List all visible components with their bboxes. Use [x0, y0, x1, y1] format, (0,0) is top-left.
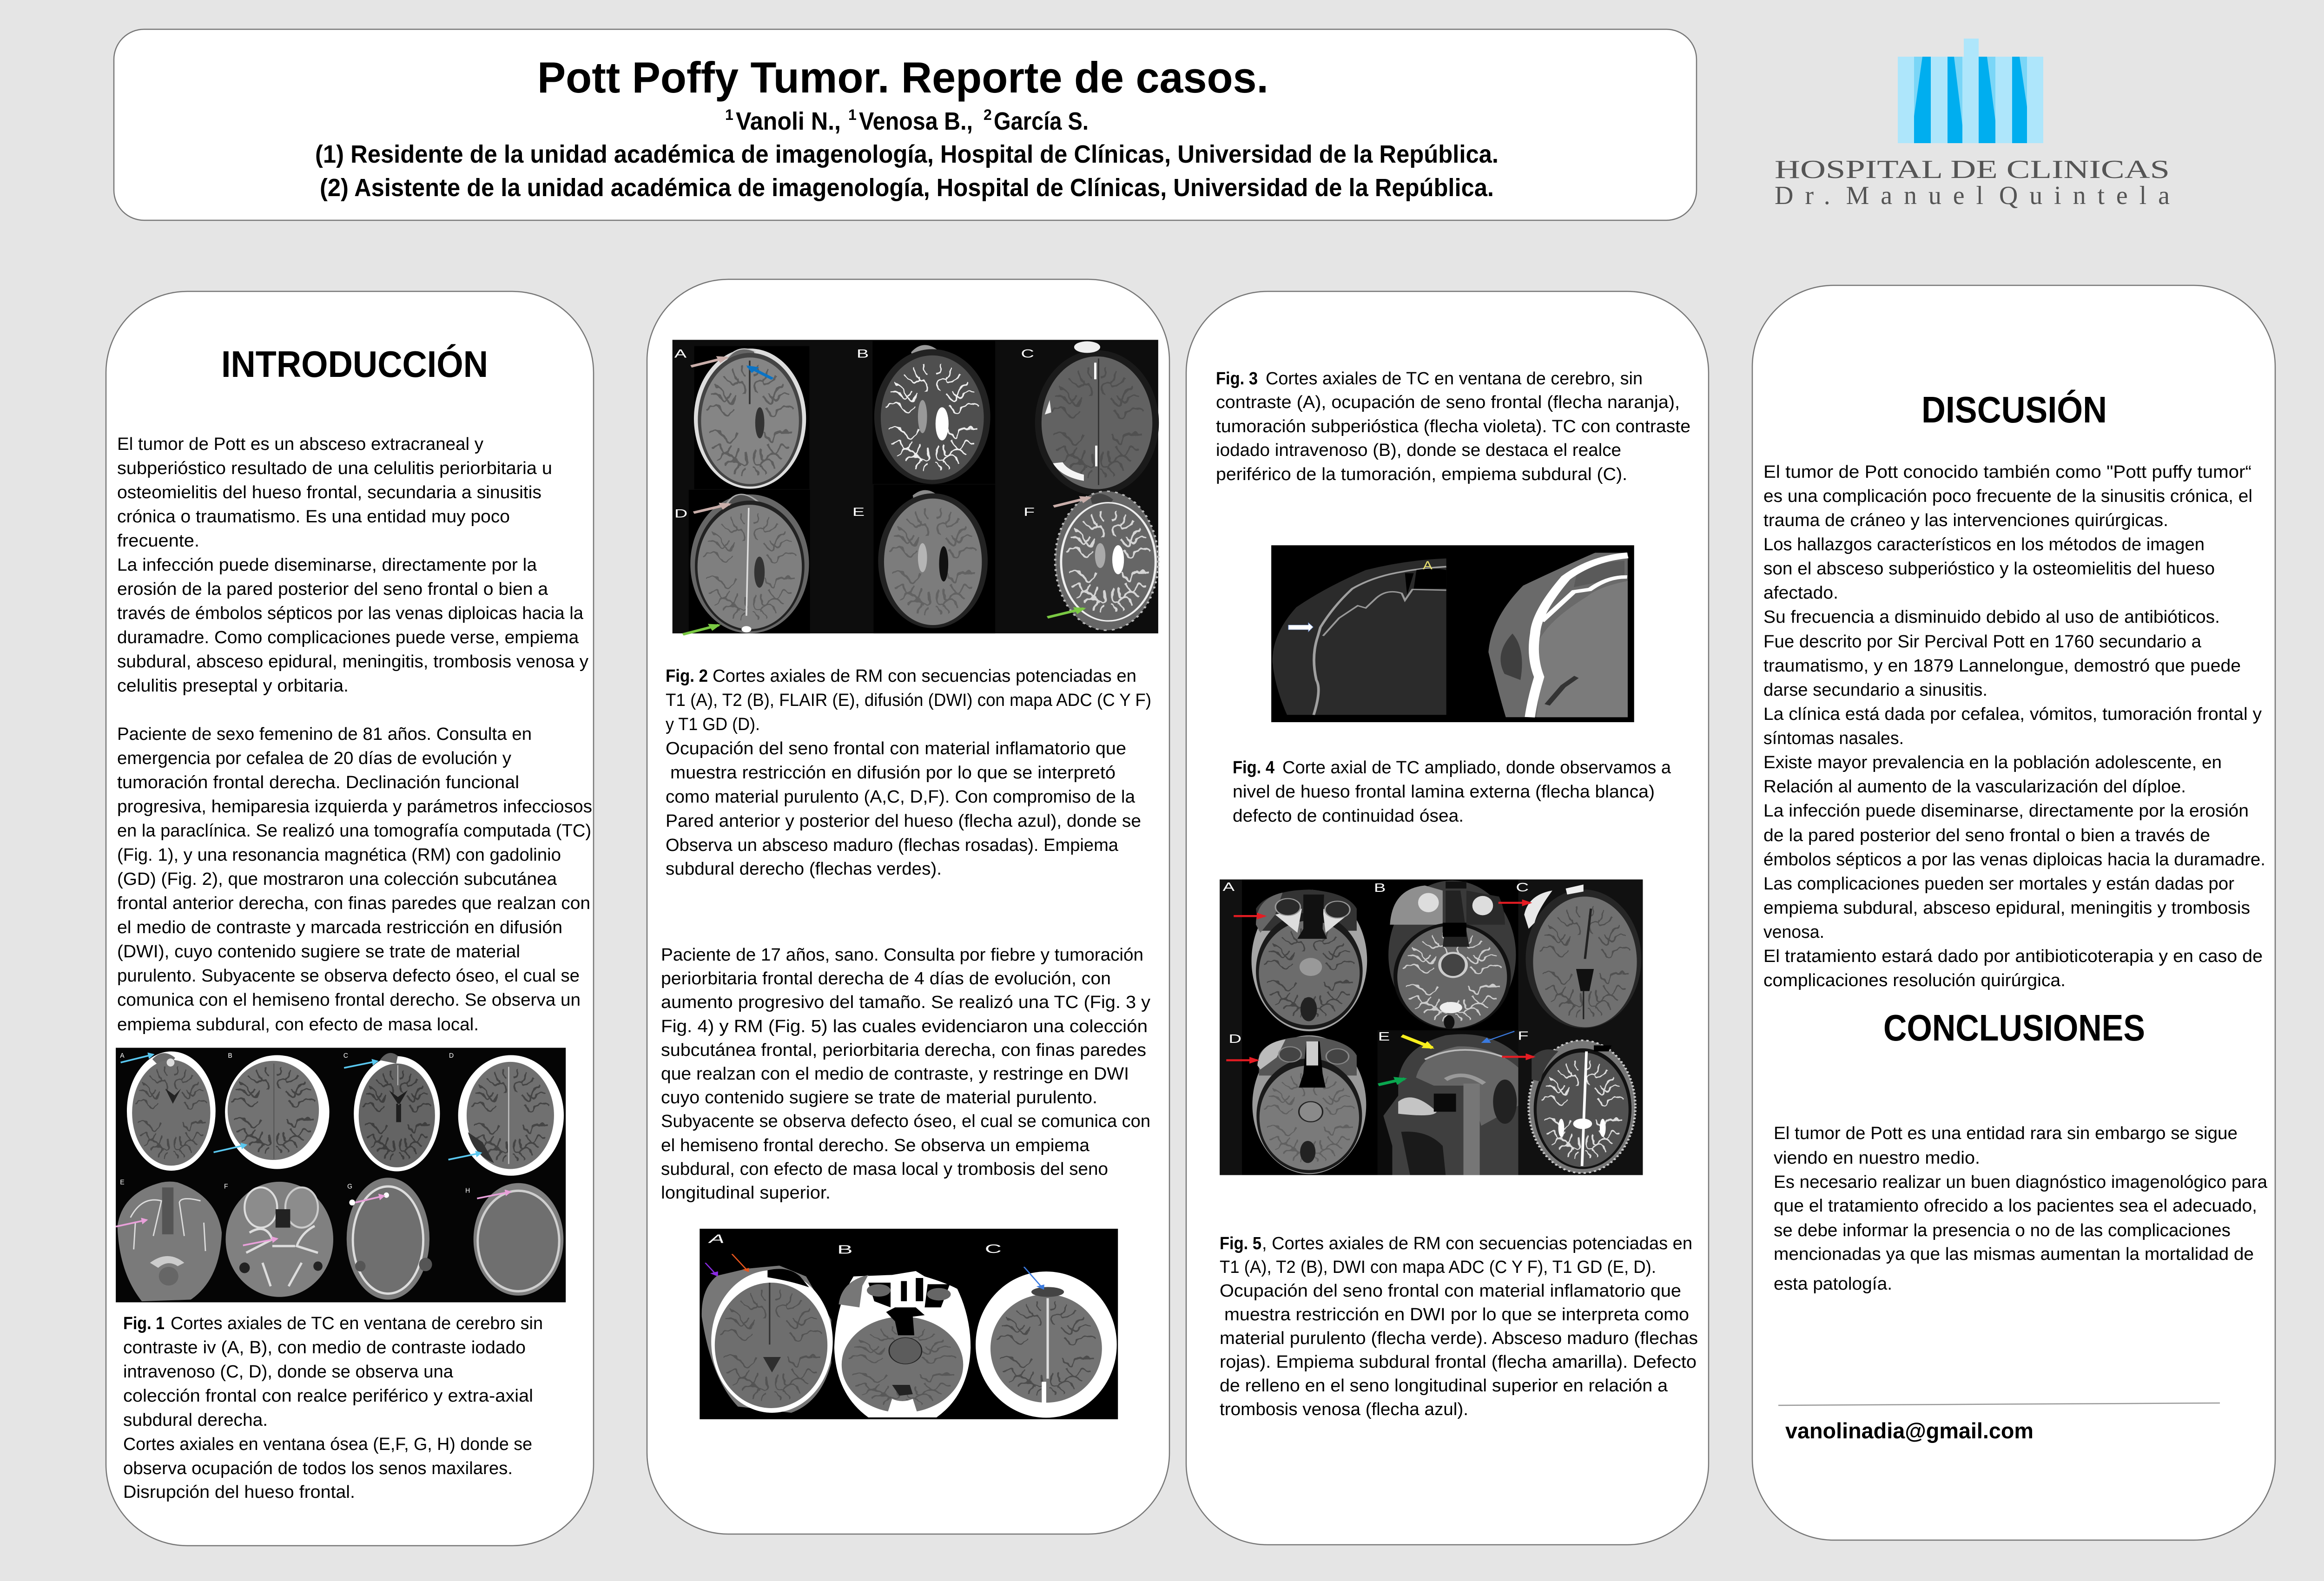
- text block: discussion: La infección puede diseminarse, directamente por la erosión: [1763, 801, 2249, 821]
- logo: Hospital de Clínicas: [1775, 39, 2170, 210]
- caption: figure 2: Cortes axiales de RM con secuencias potenciadas en: [713, 666, 1136, 686]
- caption: figure 2: [666, 666, 1151, 879]
- text block: introduction: La infección puede diseminarse, directamente por la: [117, 555, 537, 575]
- scan A: [702, 1265, 833, 1413]
- title: Pott Poffy Tumor. Reporte de casos.: [537, 53, 1268, 102]
- text block: case 1: (GD) (Fig. 2), que mostraron una colección subcutánea: [117, 870, 557, 889]
- panel letters: B: [857, 347, 869, 360]
- panel letters: [120, 1052, 470, 1195]
- text block: case 2: que realzan con el medio de contraste, y restringe en DWI: [661, 1064, 1129, 1084]
- caption: figure 1: [123, 1314, 543, 1502]
- caption: figure 2: muestra restricción en difusión por lo que se interpretó: [670, 763, 1116, 783]
- caption: figure 1: colección frontal con realce periférico y extra-axial: [123, 1386, 533, 1406]
- text block: introduction: duramadre. Como complicaciones puede verse, empiema: [117, 628, 579, 647]
- caption: figure 2: Pared anterior y posterior del hueso (flecha azul), donde se: [666, 811, 1141, 831]
- text block: case 2: [661, 945, 1150, 1203]
- caption: figure 5: de relleno en el seno longitudinal superior en relación a: [1220, 1376, 1668, 1396]
- arrows: red, yellow, blue, green: [1226, 903, 1534, 1085]
- caption: figure 5: [1220, 1234, 1698, 1419]
- caption: figure 3: contraste (A), ocupación de seno frontal (flecha naranja),: [1216, 393, 1680, 412]
- panel letters: [1223, 880, 1529, 1046]
- text block: case 1: [117, 725, 592, 1034]
- caption: figure 1: Cortes axiales de TC en ventana de cerebro sin: [171, 1314, 543, 1333]
- text block: case 1: (Fig. 1), y una resonancia magnética (RM) con gadolinio: [117, 845, 561, 865]
- text block: case 1: frontal anterior derecha, con finas paredes que realzan con: [117, 894, 590, 913]
- scan G: [347, 1178, 432, 1300]
- text block: discussion: de la pared posterior del seno frontal o bien a través de: [1763, 826, 2210, 845]
- text block: conclusions: Es necesario realizar un buen diagnóstico imagenológico para: [1774, 1173, 2268, 1192]
- scan E: [118, 1182, 222, 1301]
- scan B: [874, 345, 990, 484]
- text block: discussion: El tumor de Pott conocido también como "Pott puffy tumor“: [1763, 462, 2251, 482]
- authors: 1: [848, 106, 857, 123]
- text block: case 1: comunica con el hemiseno frontal derecho. Se observa un: [117, 990, 581, 1010]
- text block: discussion: complicaciones resolución quirúrgica.: [1763, 971, 2066, 990]
- caption: figure 2: Ocupación del seno frontal con material inflamatorio que: [666, 739, 1126, 758]
- scan C: [976, 1271, 1117, 1418]
- caption: figure 4: nivel de hueso frontal lamina externa (flecha blanca): [1233, 782, 1655, 802]
- figure 4: zoomed CT: [1271, 545, 1634, 722]
- text block: introduction: erosión de la pared posterior del seno frontal o bien a: [117, 580, 548, 599]
- text block: introduction: través de émbolos sépticos por las venas diploicas hacia la: [117, 604, 584, 623]
- text block: case 1: el medio de contraste y marcada restricción en difusión: [117, 918, 562, 937]
- text block: case 1: en la paraclínica. Se realizó una tomografía computada (TC): [117, 821, 591, 841]
- scan F: [1055, 491, 1158, 630]
- authors: Vanoli N.,: [736, 107, 841, 135]
- scan B: [834, 1271, 971, 1417]
- logo name: HOSPITAL DE CLINICAS: [1775, 155, 2170, 184]
- scan B: [225, 1055, 330, 1169]
- text block: case 1: Paciente de sexo femenino de 81 años. Consulta en: [117, 725, 532, 744]
- caption: figure 1: Cortes axiales en ventana ósea (E,F, G, H) donde se: [123, 1435, 532, 1454]
- panel letters: C: [1516, 880, 1529, 894]
- text block: case 2: Subyacente se observa defecto óseo, el cual se comunica con: [661, 1112, 1150, 1131]
- scan A: [127, 1052, 216, 1171]
- affiliation 2: (2) Asistente de la unidad académica de imagenología, Hospital de Clínicas, Universidad de la República.: [320, 174, 1494, 202]
- panel letters: A: [674, 347, 687, 360]
- panel: figure 2 and case 2: [647, 279, 1169, 1534]
- figure 2: MRI scans: [673, 340, 1159, 634]
- text block: discussion: trauma de cráneo y las intervenciones quirúrgicas.: [1763, 511, 2168, 530]
- caption: figure 4: Corte axial de TC ampliado, donde observamos a: [1282, 758, 1671, 777]
- caption: figure 2: Fig. 2: [666, 666, 708, 686]
- text block: conclusions: que el tratamiento ofrecido a los pacientes sea el adecuado,: [1774, 1196, 2257, 1216]
- scan C: [354, 1053, 440, 1172]
- arrows: blue and pink: [116, 1054, 510, 1245]
- panel letters: C: [985, 1242, 1002, 1256]
- authors: [725, 106, 1089, 135]
- authors: 2: [984, 106, 992, 123]
- caption: figure 1: contraste iv (A, B), con medio de contraste iodado: [123, 1338, 526, 1357]
- authors: García S.: [994, 107, 1089, 135]
- panel letters: F: [1023, 505, 1035, 518]
- text block: case 1: emergencia por cefalea de 20 días de evolución y: [117, 749, 511, 768]
- scan D: [690, 494, 809, 633]
- heading: introducción: INTRODUCCIÓN: [221, 343, 488, 385]
- text block: case 1: purulento. Subyacente se observa defecto óseo, el cual se: [117, 966, 580, 986]
- caption: figure 2: Observa un absceso maduro (flechas rosadas). Empiema: [666, 836, 1119, 855]
- text block: introduction: frecuente.: [117, 531, 199, 551]
- figure 5: MRI scans: [1220, 879, 1643, 1175]
- caption: figure 3: tumoración subperióstica (flecha violeta). TC con contraste: [1216, 417, 1690, 436]
- caption: figure 3: periférico de la tumoración, empiema subdural (C).: [1216, 465, 1627, 484]
- text block: discussion: Las complicaciones pueden ser mortales y están dadas por: [1763, 874, 2234, 894]
- panel letters: A: [120, 1052, 125, 1060]
- caption: figure 3: iodado intravenoso (B), donde se destaca el realce: [1216, 441, 1621, 460]
- text block: discussion: darse secundario a sinusitis.: [1763, 680, 1987, 700]
- scan: bone window: A: [1423, 559, 1433, 572]
- scan D: [458, 1055, 564, 1176]
- text block: conclusions: esta patología.: [1774, 1274, 1892, 1294]
- text block: discussion: es una complicación poco frecuente de la sinusitis crónica, el: [1763, 487, 2252, 506]
- panel letters: D: [1228, 1032, 1241, 1046]
- affiliation 1: (1) Residente de la unidad académica de imagenología, Hospital de Clínicas, Universidad de la República.: [315, 140, 1499, 168]
- header panel: [114, 29, 1697, 220]
- scan B: [1388, 881, 1516, 1029]
- caption: figure 2: subdural derecho (flechas verdes).: [666, 859, 942, 879]
- panel letters: G: [347, 1183, 352, 1190]
- panel letters: H: [465, 1187, 470, 1195]
- text block: case 2: Paciente de 17 años, sano. Consulta por fiebre y tumoración: [661, 945, 1143, 965]
- authors: Venosa B.,: [859, 107, 973, 135]
- figure 1: CT scans: [116, 1048, 566, 1302]
- panel letters: E: [1378, 1029, 1390, 1043]
- logo subtitle: Dr. Manuel Quintela: [1775, 181, 2170, 210]
- panel letters: [708, 1232, 1002, 1256]
- scan E: sagittal: [1378, 1030, 1519, 1175]
- text block: case 2: subdural, con efecto de masa local y trombosis del seno: [661, 1159, 1108, 1179]
- icon: hospital building: [1898, 39, 2043, 143]
- panel: figures 3, 4 and 5: [1186, 291, 1709, 1545]
- caption: figure 1: Fig. 1: [123, 1314, 165, 1333]
- heading: conclusiones: CONCLUSIONES: [1883, 1007, 2145, 1048]
- caption: figure 1: Disrupción del hueso frontal.: [123, 1482, 355, 1502]
- text block: discussion: El tratamiento estará dado por antibioticoterapia y en caso de: [1763, 947, 2263, 966]
- scan: bone window: [1272, 559, 1446, 715]
- scan E: [878, 490, 988, 628]
- panel letters: B: [228, 1052, 232, 1060]
- text block: case 2: cuyo contenido sugiere se trate de material purulento.: [661, 1088, 1097, 1107]
- text block: discussion: son el absceso subperióstico y la osteomielitis del hueso: [1763, 559, 2215, 579]
- caption: figure 4: [1233, 758, 1671, 826]
- text block: discussion: Fue descrito por Sir Percival Pott en 1760 secundario a: [1763, 632, 2202, 652]
- text block: conclusions: mencionadas ya que las mismas aumentan la mortalidad de: [1774, 1245, 2254, 1264]
- figure 3: CT scans: [700, 1229, 1118, 1419]
- panel letters: D: [674, 507, 687, 520]
- panel letters: B: [1374, 881, 1386, 894]
- scan: soft tissue window: [1488, 553, 1628, 717]
- panel letters: F: [224, 1183, 228, 1190]
- text block: introduction: El tumor de Pott es un absceso extracraneal y: [117, 435, 483, 454]
- text block: discussion: La clínica está dada por cefalea, vómitos, tumoración frontal y: [1763, 705, 2262, 724]
- authors: 1: [725, 106, 733, 123]
- panel letters: C: [343, 1052, 348, 1060]
- panel: discusión and conclusiones: [1752, 285, 2275, 1540]
- caption: figure 2: y T1 GD (D).: [666, 715, 760, 734]
- text block: case 2: Fig. 4) y RM (Fig. 5) las cuales evidenciaron una colección: [661, 1017, 1148, 1036]
- panel letters: A: [1223, 880, 1235, 894]
- contact email: vanolinadia@gmail.com: [1785, 1418, 2034, 1443]
- scan H: [474, 1183, 563, 1296]
- arrow: white: [1288, 623, 1313, 632]
- scan F: [226, 1182, 333, 1297]
- caption: figure 5: rojas). Empiema subdural frontal (flecha amarilla). Defecto: [1220, 1352, 1697, 1372]
- caption: figure 3: [1216, 369, 1690, 484]
- caption: figure 5: T1 (A), T2 (B), DWI con mapa ADC (C Y F), T1 GD (E, D).: [1220, 1258, 1656, 1277]
- text block: case 1: progresiva, hemiparesia izquierda y parámetros infecciosos: [117, 797, 592, 817]
- text block: introduction: subperióstico resultado de una celulitis periorbitaria u: [117, 459, 552, 478]
- text block: case 1: empiema subdural, con efecto de masa local.: [117, 1015, 479, 1034]
- panel letters: [674, 347, 1035, 520]
- caption: figure 3: Cortes axiales de TC en ventana de cerebro, sin: [1266, 369, 1643, 389]
- panel letters: E: [120, 1179, 125, 1186]
- text block: introduction: crónica o traumatismo. Es una entidad muy poco: [117, 507, 510, 527]
- heading: discusión: DISCUSIÓN: [1921, 389, 2107, 430]
- text block: introduction: subdural, absceso epidural, meningitis, trombosis venosa y: [117, 652, 588, 672]
- scan C: [1035, 341, 1159, 495]
- text block: discussion: empiema subdural, absceso epidural, meningitis y trombosis: [1763, 898, 2250, 918]
- text block: introduction: [117, 435, 588, 696]
- text block: discussion: afectado.: [1763, 583, 1838, 603]
- text block: conclusions: [1774, 1124, 2268, 1294]
- scan D: [1252, 1035, 1366, 1174]
- caption: figure 5: Fig. 5: [1220, 1234, 1261, 1253]
- caption: figure 5: , Cortes axiales de RM con secuencias potenciadas en: [1262, 1234, 1692, 1253]
- caption: figure 5: Ocupación del seno frontal con material inflamatorio que: [1220, 1281, 1681, 1301]
- text block: case 2: aumento progresivo del tamaño. Se realizó una TC (Fig. 3 y: [661, 993, 1150, 1012]
- text block: introduction: osteomielitis del hueso frontal, secundaria a sinusitis: [117, 483, 541, 502]
- caption: figure 4: Fig. 4: [1233, 758, 1274, 777]
- scan A: [1251, 889, 1367, 1031]
- text block: discussion: Los hallazgos característicos en los métodos de imagen: [1763, 535, 2205, 554]
- text block: conclusions: El tumor de Pott es una entidad rara sin embargo se sigue: [1774, 1124, 2238, 1143]
- text block: case 2: subcutánea frontal, periorbitaria derecha, con finas paredes: [661, 1041, 1146, 1060]
- panel: introducción: [106, 291, 594, 1546]
- text block: case 1: tumoración frontal derecha. Declinación funcional: [117, 773, 519, 792]
- scan C: [1524, 884, 1641, 1028]
- caption: figure 4: defecto de continuidad ósea.: [1233, 806, 1464, 826]
- text block: discussion: [1763, 462, 2265, 990]
- text block: conclusions: viendo en nuestro medio.: [1774, 1148, 1980, 1168]
- panel letters: F: [1518, 1028, 1529, 1042]
- text block: discussion: Existe mayor prevalencia en la población adolescente, en: [1763, 753, 2222, 772]
- scan F: [1529, 1041, 1635, 1173]
- caption: figure 3: Fig. 3: [1216, 369, 1258, 389]
- caption: figure 5: material purulento (flecha verde). Absceso maduro (flechas: [1220, 1329, 1698, 1348]
- scan A: [694, 349, 806, 489]
- caption: figure 2: T1 (A), T2 (B), FLAIR (E), difusión (DWI) con mapa ADC (C Y F): [666, 691, 1151, 710]
- text block: discussion: traumatismo, y en 1879 Lannelongue, demostró que puede: [1763, 656, 2241, 676]
- panel letters: C: [1021, 347, 1034, 360]
- caption: figure 5: muestra restricción en DWI por lo que se interpreta como: [1224, 1305, 1689, 1324]
- panel letters: E: [852, 505, 865, 518]
- panel letters: A: [708, 1232, 725, 1246]
- text block: conclusions: se debe informar la presencia o no de las complicaciones: [1774, 1221, 2231, 1240]
- text block: discussion: Relación al aumento de la vascularización del díploe.: [1763, 777, 2186, 797]
- panel letters: D: [449, 1052, 454, 1060]
- text block: discussion: venosa.: [1763, 922, 1824, 942]
- arrows: violet, orange, blue: [705, 1254, 1043, 1289]
- panel letters: B: [837, 1243, 852, 1256]
- text block: introduction: celulitis preseptal y orbitaria.: [117, 676, 349, 696]
- text block: case 2: el hemiseno frontal derecho. Se observa un empiema: [661, 1136, 1090, 1155]
- text block: discussion: síntomas nasales.: [1763, 729, 1904, 748]
- caption: figure 2: como material purulento (A,C, D,F). Con compromiso de la: [666, 787, 1136, 807]
- caption: figure 1: intravenoso (C, D), donde se observa una: [123, 1362, 454, 1382]
- caption: figure 1: subdural derecha.: [123, 1410, 268, 1430]
- caption: figure 1: observa ocupación de todos los senos maxilares.: [123, 1459, 513, 1478]
- text block: case 2: longitudinal superior.: [661, 1183, 831, 1203]
- text block: discussion: émbolos sépticos a por las venas diploicas hacia la duramadre.: [1763, 850, 2265, 870]
- text block: discussion: Su frecuencia a disminuido debido al uso de antibióticos.: [1763, 607, 2220, 627]
- arrows: rose, blue, green: [683, 357, 1090, 634]
- text block: case 1: (DWI), cuyo contenido sugiere se trate de material: [117, 942, 520, 962]
- caption: figure 5: trombosis venosa (flecha azul).: [1220, 1400, 1468, 1419]
- text block: case 2: periorbitaria frontal derecha de 4 días de evolución, con: [661, 969, 1111, 988]
